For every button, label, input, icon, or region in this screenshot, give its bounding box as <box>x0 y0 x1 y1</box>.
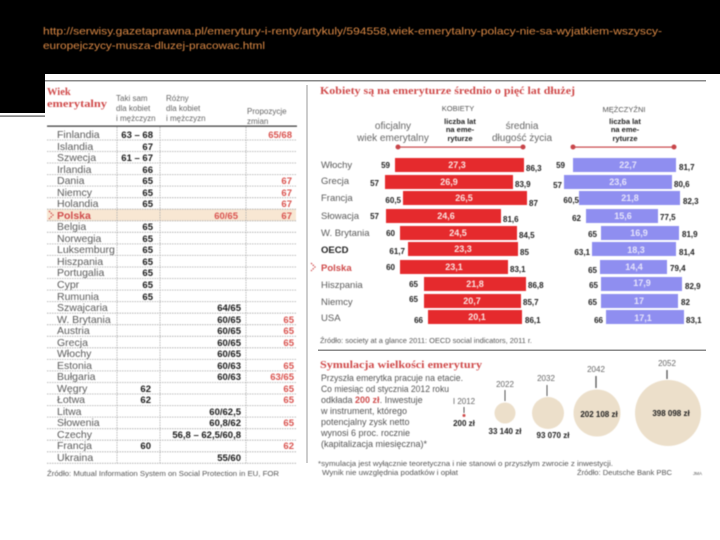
women retirement age values: 60,5 <box>385 196 402 205</box>
women life expectancy values: 83,1 <box>510 265 526 274</box>
country names: Bułgaria <box>57 371 96 383</box>
country names: Szwajcaria <box>57 302 108 314</box>
country names: Ukraina <box>57 452 93 464</box>
milestone: 2022 <box>489 380 522 436</box>
source URL: europejczycy-musza-dluzej-pracowac.html <box>43 40 265 52</box>
same age values: 60 <box>140 441 151 452</box>
women years values: 23,1 <box>445 262 463 272</box>
country names: Węgry <box>57 383 88 395</box>
country labels <box>321 160 370 324</box>
women retirement age values: 66 <box>414 316 424 325</box>
panel: retirement age table <box>47 87 297 478</box>
men years values: 23,6 <box>609 177 627 187</box>
same age values: 65 <box>142 176 154 187</box>
different age values: 60/65 <box>217 326 242 337</box>
same age values: 65 <box>142 222 154 233</box>
country names: Hiszpania <box>57 256 103 268</box>
women column headers: liczba lat <box>444 117 476 126</box>
men life expectancy values: 80,6 <box>674 180 690 189</box>
women life expectancy values: 85,7 <box>523 298 539 307</box>
women retirement age values: 57 <box>370 212 380 221</box>
women retirement age values: 57 <box>370 179 380 188</box>
simulation description: Co miesiąc od stycznia 2012 roku <box>321 384 449 394</box>
women life expectancy values <box>503 164 544 325</box>
proposed changes values: 65 <box>283 338 295 349</box>
chart heading: Kobiety są na emeryturze średnio o pięć lat dłużej <box>320 86 575 97</box>
country names: Czechy <box>57 429 93 441</box>
simulation source: Źródło: Deutsche Bank PBC <box>577 468 672 477</box>
men years values: 22,7 <box>619 160 637 170</box>
women retirement age values <box>370 161 424 325</box>
country names: Słowenia <box>57 417 100 429</box>
men retirement age values: 63,1 <box>574 248 591 257</box>
men retirement age values: 62 <box>572 214 582 223</box>
country names: Niemcy <box>57 187 93 199</box>
country labels: Grecja <box>321 176 350 187</box>
men range line <box>570 144 676 150</box>
men life expectancy values: 79,4 <box>670 264 686 273</box>
women years values: 26,5 <box>455 193 473 203</box>
milestone: 2032: 93 070 zł <box>537 431 570 440</box>
country labels: W. Brytania <box>321 228 370 239</box>
men life expectancy values: 82 <box>681 298 690 307</box>
women bars <box>385 158 527 324</box>
simulation description: (kapitalizacja miesięczna)* <box>321 439 428 449</box>
column headers: dla kobiet <box>166 104 201 113</box>
different age values: 60/65 <box>217 338 242 349</box>
country names: Irlandia <box>57 164 92 176</box>
women column headers: oficjalny <box>375 121 411 132</box>
men retirement age values: 65 <box>588 298 598 307</box>
table heading: Wiek <box>47 87 71 98</box>
women column headers: wiek emerytalny <box>356 133 429 144</box>
milestone: 2042: 202 108 zł <box>580 410 618 419</box>
country labels: Hiszpania <box>321 280 363 291</box>
milestone: 2042: 2042 <box>587 365 605 374</box>
source URL: http://serwisy.gazetaprawna.pl/emerytury-i-renty/artykuly/594558,wiek-emerytalny-polacy-nie-sa-wyjatkiem-wszyscy- <box>43 26 663 38</box>
marker: Polska <box>49 211 53 219</box>
men years values: 18,3 <box>627 245 645 255</box>
country names: Włochy <box>57 348 92 360</box>
same age values: 66 <box>142 165 153 176</box>
different age values: 60/65 <box>217 315 242 326</box>
country labels: Polska <box>321 263 352 274</box>
author mark: JMA <box>693 471 702 476</box>
men column headers: ryturze <box>612 134 638 143</box>
women years values: 23,3 <box>454 244 472 254</box>
men life expectancy values: 83,1 <box>686 316 702 325</box>
same age values: 61 – 67 <box>121 153 153 164</box>
footnote <box>318 461 613 477</box>
women retirement age values: 61,7 <box>389 247 406 256</box>
country names: Luksemburg <box>57 244 115 256</box>
men life expectancy values: 82,3 <box>683 197 699 206</box>
women retirement age values: 65 <box>409 295 419 304</box>
men retirement age values: 57 <box>553 181 563 190</box>
simulation description: w instrument, którego <box>320 406 407 416</box>
same age values: 63 – 68 <box>121 130 153 141</box>
men retirement age values: 65 <box>589 281 599 290</box>
same age values: 65 <box>142 199 154 210</box>
simulation description: wynosi 6 proc. rocznie <box>320 428 410 438</box>
men column headers: na eme- <box>611 125 640 134</box>
different age values: 64/65 <box>217 303 242 314</box>
women years values: 27,3 <box>448 160 466 170</box>
proposed changes values: 65 <box>283 361 295 372</box>
milestone: I 2012 <box>453 397 476 428</box>
footnote: Wynik nie uwzględnia podatków i opłat <box>322 470 458 477</box>
country names: Polska <box>57 210 91 222</box>
women range line <box>396 144 526 150</box>
different age values: 60,8/62 <box>209 418 241 429</box>
milestone: 2052: 2052 <box>658 359 676 368</box>
men column headers <box>603 105 645 143</box>
proposed changes values: 63/65 <box>270 372 295 383</box>
country labels: OECD <box>321 245 349 256</box>
men retirement age values: 65 <box>588 266 598 275</box>
women life expectancy values: 81,6 <box>503 215 519 224</box>
men retirement age values: 59 <box>556 161 566 170</box>
women retirement age values: 59 <box>381 161 391 170</box>
country names: Dania <box>57 175 85 187</box>
footnote: *symulacja jest wyłącznie teoretyczna i nie stanowi o przyszłym zwrocie z inwestycji. <box>318 461 613 468</box>
black header background <box>0 0 720 113</box>
men column headers: liczba lat <box>609 117 641 126</box>
different age values: 60/63 <box>217 361 241 372</box>
proposed changes values: 67 <box>281 188 292 199</box>
women column headers: średnia <box>506 121 539 132</box>
different age values: 55/60 <box>217 453 241 464</box>
different age values: 60/62,5 <box>209 407 242 418</box>
men years values: 17,9 <box>633 278 651 288</box>
simulation description: potencjalny zysk netto <box>321 417 410 427</box>
country labels: Słowacja <box>321 211 360 222</box>
simulation heading: Symulacja wielkości emerytury <box>320 360 483 371</box>
country names: Łotwa <box>57 394 85 406</box>
country labels: Francja <box>321 193 353 204</box>
different age values <box>172 303 242 464</box>
column headers: Propozycje <box>247 107 287 116</box>
women years values <box>437 160 486 322</box>
men years values: 16,9 <box>630 228 648 238</box>
same age values: 65 <box>142 280 154 291</box>
men years values: 17,1 <box>634 313 652 323</box>
proposed changes values: 65/68 <box>268 130 292 141</box>
country names <box>57 129 115 464</box>
same age values <box>121 130 154 452</box>
country names: Estonia <box>57 360 92 372</box>
country names: Cypr <box>57 279 80 291</box>
table heading: emerytalny <box>47 99 108 110</box>
men bars <box>564 158 684 324</box>
same age values: 65 <box>142 245 154 256</box>
country labels: Niemcy <box>321 297 353 308</box>
men life expectancy values: 81,9 <box>682 230 698 239</box>
milestone: 2032 <box>532 374 570 440</box>
women retirement age values: 60 <box>386 263 396 272</box>
milestone: I 2012: I 2012 <box>453 397 476 406</box>
column headers: Taki sam <box>116 94 148 103</box>
country names: Norwegia <box>57 233 102 245</box>
proposed changes values: 60/65 <box>214 211 239 222</box>
men years values: 21,8 <box>621 193 639 203</box>
milestone: 2022: 33 140 zł <box>489 427 522 436</box>
women life expectancy values: 83,9 <box>515 180 531 189</box>
proposed changes values: 62 <box>283 441 294 452</box>
country names: Finlandia <box>57 129 100 141</box>
women life expectancy values: 84,5 <box>519 231 535 240</box>
simulation description <box>320 373 463 449</box>
column headers <box>116 94 287 126</box>
country labels: Włochy <box>321 160 352 171</box>
source URL <box>43 26 663 52</box>
women years values: 26,9 <box>440 177 458 187</box>
women column headers: ryturze <box>447 134 473 143</box>
men life expectancy values: 77,5 <box>660 213 676 222</box>
same age values: 65 <box>142 292 154 303</box>
same age values: 67 <box>142 142 153 153</box>
column headers: dla kobiet <box>116 104 151 113</box>
men life expectancy values: 81,7 <box>679 163 695 172</box>
simulation description: Przyszła emerytka pracuje na etacie. <box>321 373 463 383</box>
milestone: 2052: 398 098 zł <box>652 409 690 418</box>
column headers: i mężczyzn <box>166 114 206 123</box>
country names: Austria <box>57 325 90 337</box>
men years values: 15,6 <box>614 211 632 221</box>
marker: Polska <box>311 263 315 271</box>
country names: Francja <box>57 440 92 452</box>
country names: Islandia <box>57 141 93 153</box>
women column headers: na eme- <box>446 125 475 134</box>
different age values: 56,8 – 62,5/60,8 <box>172 430 241 441</box>
proposed changes values: 65 <box>283 395 295 406</box>
country names: Grecja <box>57 337 88 349</box>
proposed changes values: 67 <box>281 176 292 187</box>
men retirement age values: 66 <box>594 316 604 325</box>
women years values: 21,8 <box>466 279 484 289</box>
panel: years in retirement chart <box>311 86 702 345</box>
men years values: 17 <box>634 296 644 306</box>
same age values: 65 <box>142 234 154 245</box>
women life expectancy values: 85 <box>520 248 529 257</box>
proposed changes values: 65 <box>283 326 295 337</box>
milestone: 2022: 2022 <box>496 380 514 389</box>
men retirement age values <box>553 161 604 325</box>
table source: Źródło: Mutual Information System on Social Protection in EU, FOR <box>47 469 279 478</box>
women years values: 24,5 <box>449 228 467 238</box>
proposed changes values: 65 <box>283 384 295 395</box>
milestone: I 2012: 200 zł <box>453 419 476 428</box>
country labels: USA <box>321 313 341 324</box>
simulation description: odkłada 200 zł. Inwestuje <box>321 395 423 405</box>
women column headers <box>356 104 552 144</box>
different age values: 60/65 <box>217 349 242 360</box>
same age values: 65 <box>142 268 154 279</box>
table heading <box>47 87 108 110</box>
milestone: 2052 <box>635 359 701 446</box>
women life expectancy values: 86,1 <box>525 316 541 325</box>
chart source: Źródło: society at a glance 2011: OECD social indicators, 2011 r. <box>320 336 532 345</box>
men retirement age values: 65 <box>588 230 598 239</box>
women years values: 20,1 <box>468 312 486 322</box>
milestone: 2032: 2032 <box>537 374 555 383</box>
same age values: 62 <box>140 384 151 395</box>
proposed changes values: 65 <box>283 315 295 326</box>
country names: Belgia <box>57 221 86 233</box>
men years values: 14,4 <box>625 262 643 272</box>
women years values: 24,6 <box>437 211 455 221</box>
different age values: 60/63 <box>217 372 241 383</box>
panel: pension simulation <box>318 359 702 477</box>
men life expectancy values: 82,9 <box>685 282 701 291</box>
women retirement age values: 65 <box>409 280 419 289</box>
milestone: 2042 <box>574 365 620 436</box>
same age values: 65 <box>142 188 154 199</box>
country names: Holandia <box>57 198 99 210</box>
proposed changes values <box>214 130 295 452</box>
country names: Litwa <box>57 406 82 418</box>
proposed changes values: 65 <box>283 418 295 429</box>
country names: Rumunia <box>57 291 99 303</box>
women life expectancy values: 86,8 <box>528 281 544 290</box>
women years values: 20,7 <box>463 296 481 306</box>
country names: Szwecja <box>57 152 96 164</box>
column headers: i mężczyzn <box>116 114 156 123</box>
country names: W. Brytania <box>57 314 111 326</box>
men life expectancy values <box>660 163 702 325</box>
women life expectancy values: 87 <box>529 199 538 208</box>
proposed changes values: 67 <box>281 211 292 222</box>
men column headers: MĘŻCZYŹNI <box>603 105 645 114</box>
column headers: Różny <box>166 94 189 103</box>
men retirement age values: 60,5 <box>563 196 580 205</box>
country names: Portugalia <box>57 267 104 279</box>
women column headers: długość życia <box>492 133 552 144</box>
Polska highlight <box>47 209 296 221</box>
women column headers: KOBIETY <box>442 104 474 113</box>
men years values <box>609 160 652 323</box>
women retirement age values: 60 <box>386 229 396 238</box>
same age values: 65 <box>142 257 154 268</box>
same age values: 62 <box>140 395 151 406</box>
women life expectancy values: 86,3 <box>526 164 542 173</box>
column headers: zmian <box>247 117 268 126</box>
proposed changes values: 67 <box>281 199 292 210</box>
men life expectancy values: 81,4 <box>679 248 695 257</box>
